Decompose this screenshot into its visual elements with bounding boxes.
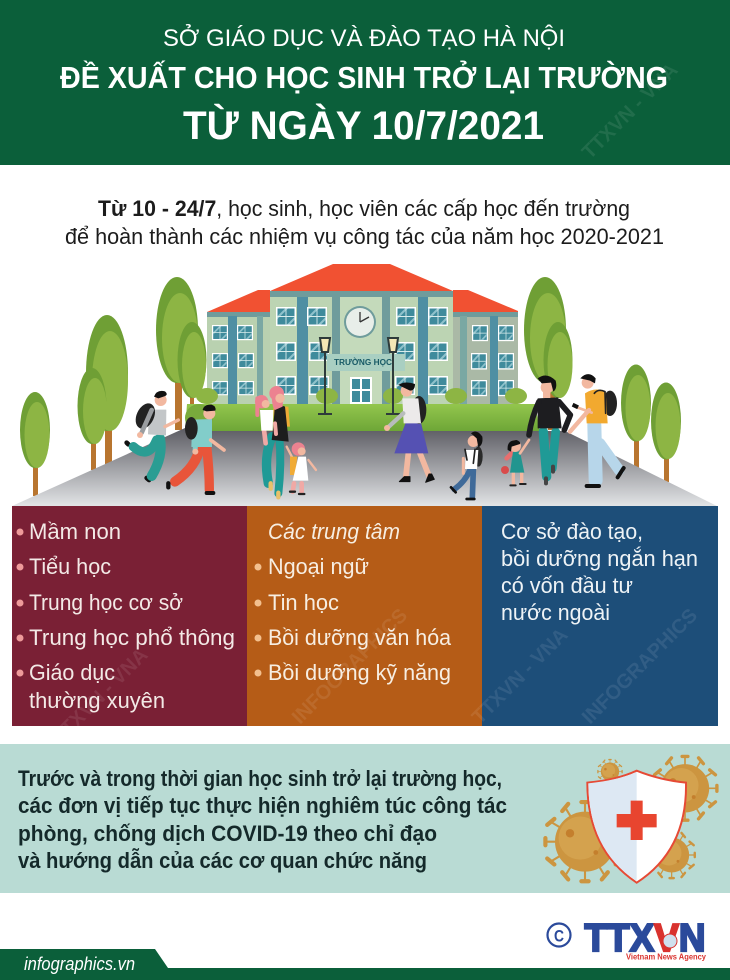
panel: orange centres xyxy=(247,506,482,726)
list: school levels xyxy=(29,519,235,713)
footer site name: infographics.vn xyxy=(24,954,135,974)
mother with children xyxy=(255,386,316,497)
watermarks: TTXVN - VNA xyxy=(578,59,682,164)
icon: shield with viruses xyxy=(545,756,717,883)
clock xyxy=(344,306,376,338)
windows xyxy=(212,325,228,340)
logo: TTXVN: Vietnam News Agency xyxy=(626,952,706,962)
panel: blue foreign-invested xyxy=(482,506,718,726)
intro text xyxy=(65,196,664,249)
person walking red trousers xyxy=(168,405,224,493)
man in black sweater xyxy=(529,375,570,483)
logo: TTXVN: TTXVN xyxy=(584,917,706,960)
list: centres: Ngoại ngữ xyxy=(268,554,369,579)
callout text: và hướng dẫn của các cơ quan chức năng xyxy=(18,848,427,873)
list: school levels: Mầm non xyxy=(29,519,121,544)
woman in purple skirt xyxy=(384,383,434,482)
list: centres: Bồi dưỡng văn hóa xyxy=(268,625,452,650)
list: school levels: Giáo dục xyxy=(29,660,115,685)
little girl in teal dress xyxy=(501,440,529,485)
header line 3: TỪ NGÀY 10/7/2021 xyxy=(183,102,544,148)
intro text: để hoàn thành các nhiệm vụ công tác của năm học 2020-2021 xyxy=(65,224,664,249)
illustration: lamp posts xyxy=(318,338,400,414)
person running with backpack xyxy=(127,391,178,480)
door xyxy=(350,377,372,404)
watermarks: TTXVN - VNA xyxy=(468,624,572,729)
text: foreign-invested centres xyxy=(501,519,698,625)
panel: maroon school levels xyxy=(12,506,247,726)
header line 1: SỞ GIÁO DỤC VÀ ĐÀO TẠO HÀ NỘI xyxy=(163,23,565,52)
watermarks xyxy=(48,59,702,749)
callout text: phòng, chống dịch COVID-19 theo chỉ đạo xyxy=(18,821,437,846)
text: foreign-invested centres: Cơ sở đào tạo, xyxy=(501,519,643,544)
header banner xyxy=(0,0,730,165)
callout text: Trước và trong thời gian học sinh trở lại trường học, xyxy=(18,766,502,791)
list: centres: Tin học xyxy=(268,590,339,615)
list: school levels: Trung học phổ thông xyxy=(29,625,235,650)
list: centres xyxy=(268,519,452,685)
callout text: các đơn vị tiếp tục thực hiện nghiêm túc công tác xyxy=(18,793,507,818)
logo: copyright mark: C xyxy=(554,926,564,946)
intro text: Từ 10 - 24/7, học sinh, học viên các cấp học đến trường xyxy=(98,196,630,221)
callout band xyxy=(0,744,730,893)
list: centres: Các trung tâm xyxy=(268,519,400,544)
list: centres: Bồi dưỡng kỹ năng xyxy=(268,660,451,685)
illustration: school building xyxy=(207,264,518,404)
list: school levels: thường xuyên xyxy=(29,688,165,713)
illustration: people left group xyxy=(127,386,316,497)
watermarks: INFOGRAPHICS xyxy=(578,605,702,729)
logo: copyright mark xyxy=(548,924,570,946)
callout text xyxy=(18,766,507,873)
boy with backpack xyxy=(451,431,483,499)
watermarks: INFOGRAPHICS xyxy=(288,605,412,729)
watermarks: TTXVN - VNA xyxy=(48,644,152,749)
illustration: school building: TRƯỜNG HỌC xyxy=(334,358,392,367)
sign xyxy=(327,354,405,371)
centre block xyxy=(270,291,453,404)
right wing xyxy=(453,312,518,404)
text: foreign-invested centres: nước ngoài xyxy=(501,600,610,625)
footer bar xyxy=(0,949,730,980)
young man with yellow shirt xyxy=(570,374,624,486)
illustration: people right group xyxy=(384,374,624,499)
text: foreign-invested centres: có vốn đầu tư xyxy=(501,573,633,598)
header line 2: ĐỀ XUẤT CHO HỌC SINH TRỞ LẠI TRƯỜNG xyxy=(60,59,668,95)
left wing xyxy=(207,312,270,404)
text: foreign-invested centres: bồi dưỡng ngắn hạn xyxy=(501,546,698,571)
illustration: lawn and road xyxy=(12,388,717,506)
list: school levels: Trung học cơ sở xyxy=(29,590,183,615)
illustration: trees xyxy=(20,277,681,496)
list: school levels: Tiểu học xyxy=(29,554,111,579)
